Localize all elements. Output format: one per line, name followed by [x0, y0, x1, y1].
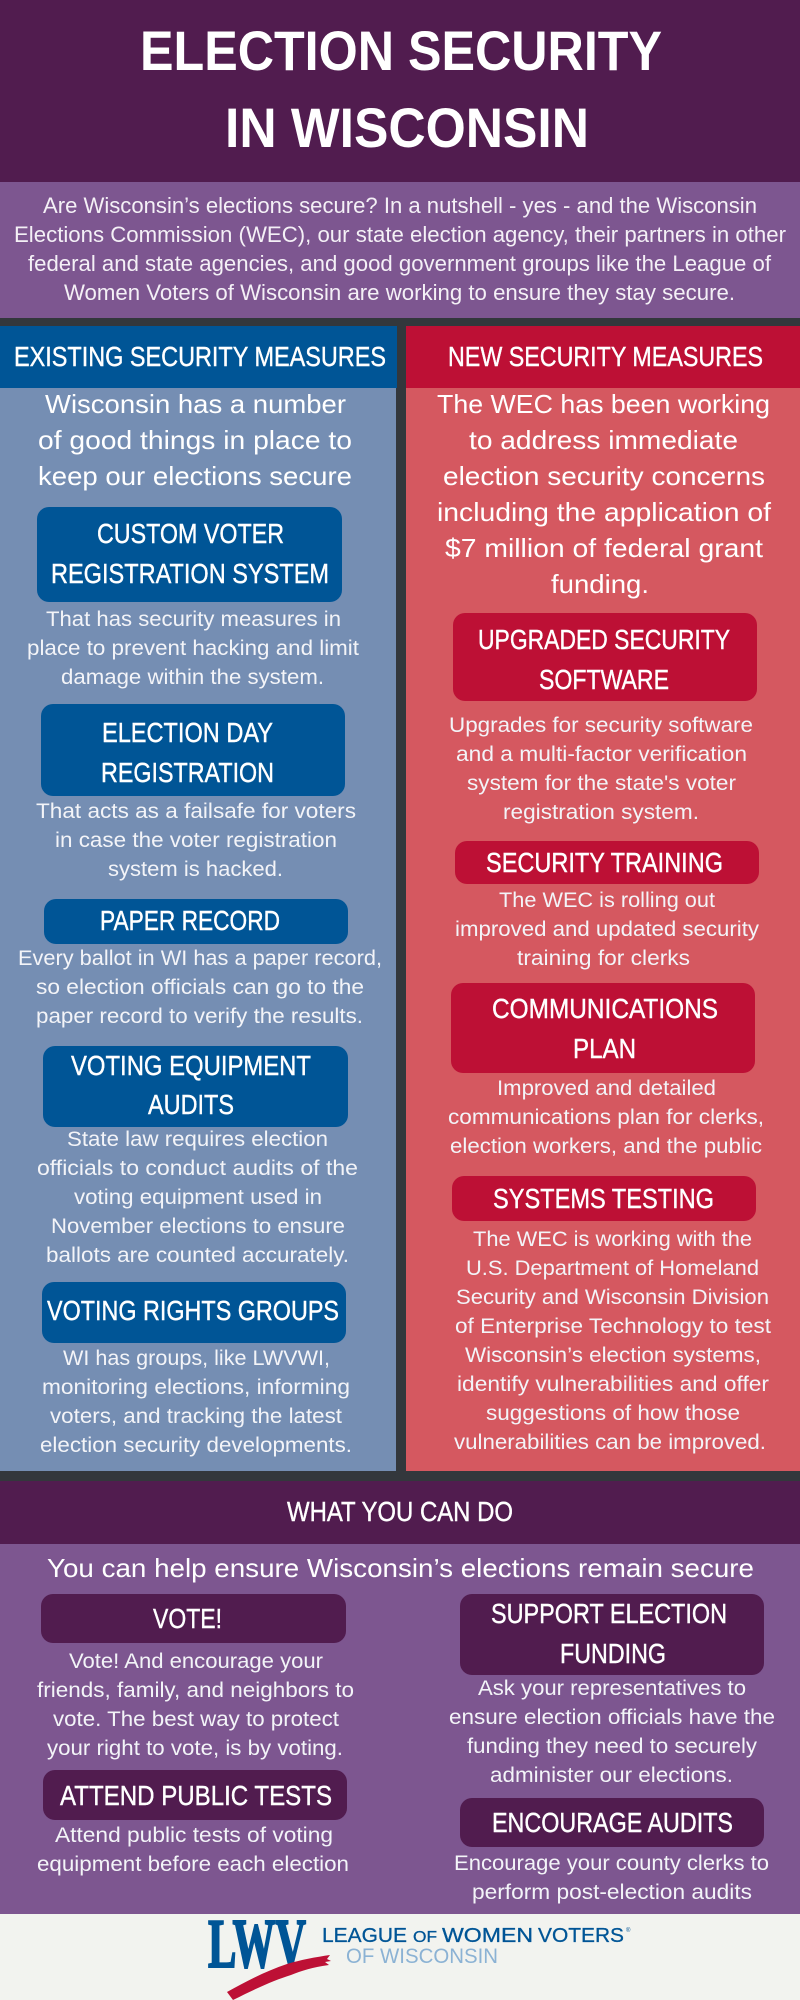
- lead text: existing: Wisconsin has a number: [45, 389, 346, 419]
- text: support election funding: funding they need to securely: [467, 1735, 758, 1758]
- text: encourage audits: [454, 1852, 769, 1904]
- text: security training: improved and updated security: [455, 918, 760, 941]
- text: systems testing: identify vulnerabilities and offer: [457, 1373, 769, 1396]
- text: paper record: so election officials can go to the: [36, 976, 364, 999]
- intro text block: Women Voters of Wisconsin are working to ensure they stay secure.: [64, 280, 735, 305]
- text: voting equipment audits: officials to conduct audits of the: [37, 1157, 358, 1180]
- text: voting rights groups: voters, and tracking the latest: [50, 1405, 342, 1428]
- text: voting rights groups: monitoring elections, informing: [42, 1376, 350, 1399]
- title: [0, 0, 800, 182]
- button: vote: [41, 1594, 346, 1643]
- button: voting rights groups: [42, 1282, 346, 1343]
- button: voting equipment audits: [43, 1046, 348, 1127]
- lead text: new: $7 million of federal grant: [445, 533, 764, 563]
- button: upgraded security software: UPGRADED SECURITY: [478, 624, 730, 655]
- text: attend public tests: Attend public tests of voting: [55, 1824, 333, 1847]
- button: election day registration: REGISTRATION: [101, 757, 274, 788]
- text: encourage audits: Encourage your county clerks to: [454, 1852, 769, 1875]
- text: custom voter registration system: place to prevent hacking and limit: [27, 637, 359, 660]
- text: election day registration: That acts as a failsafe for voters: [36, 800, 356, 823]
- text: vote: vote. The best way to protect: [53, 1708, 339, 1731]
- logo wordmark: VOTERS: [538, 1924, 624, 1947]
- intro text block: Are Wisconsin’s elections secure? In a nutshell - yes - and the Wisconsin: [43, 193, 757, 218]
- text: vote: Vote! And encourage your: [69, 1650, 323, 1673]
- heading: existing security measures: EXISTING SECURITY MEASURES: [14, 341, 386, 372]
- text: custom voter registration system: damage within the system.: [61, 666, 324, 689]
- heading: what you can do: WHAT YOU CAN DO: [287, 1496, 513, 1527]
- button: election day registration: ELECTION DAY: [102, 717, 273, 748]
- text: custom voter registration system: That has security measures in: [46, 608, 341, 631]
- button: encourage audits: ENCOURAGE AUDITS: [492, 1807, 733, 1838]
- heading: existing security measures: [0, 326, 397, 388]
- lead text: existing: of good things in place to: [38, 425, 352, 455]
- intro text block: federal and state agencies, and good government groups like the League of: [28, 251, 772, 276]
- panel: what you can do: [0, 1481, 800, 1914]
- text: attend public tests: [37, 1824, 349, 1876]
- intro text block: Elections Commission (WEC), our state election agency, their partners in other: [14, 222, 786, 247]
- lead text: existing: keep our elections secure: [38, 461, 352, 491]
- text: encourage audits: perform post-election audits: [472, 1881, 752, 1904]
- text: voting equipment audits: voting equipment used in: [74, 1186, 322, 1209]
- text: upgraded security software: and a multi-factor verification: [456, 743, 747, 766]
- lead text: existing: [38, 389, 352, 491]
- text: vote: your right to vote, is by voting.: [47, 1737, 343, 1760]
- button: support election funding: [460, 1594, 764, 1675]
- text: communications plan: communications plan for clerks,: [448, 1106, 764, 1129]
- panel: existing security measures: [0, 326, 397, 1471]
- text: upgraded security software: [449, 714, 753, 824]
- logo wordmark: ®: [626, 1927, 631, 1934]
- text: support election funding: [449, 1677, 775, 1787]
- text: support election funding: ensure election officials have the: [449, 1706, 775, 1729]
- button: paper record: [44, 899, 348, 944]
- button: attend public tests: ATTEND PUBLIC TESTS: [60, 1780, 332, 1811]
- text: paper record: [18, 947, 382, 1028]
- button: support election funding: SUPPORT ELECTION: [491, 1598, 727, 1629]
- text: voting equipment audits: State law requires election: [67, 1128, 328, 1151]
- text: vote: [37, 1650, 354, 1760]
- button: communications plan: PLAN: [573, 1033, 636, 1064]
- text: upgraded security software: registration system.: [503, 801, 699, 824]
- text: election day registration: in case the voter registration: [55, 829, 337, 852]
- lead text: new: including the application of: [437, 497, 772, 527]
- text: attend public tests: equipment before each election: [37, 1853, 349, 1876]
- button: communications plan: [451, 983, 755, 1073]
- text: systems testing: Security and Wisconsin Division: [456, 1286, 769, 1309]
- text: election day registration: [36, 800, 356, 881]
- logo wordmark: LEAGUE: [322, 1924, 407, 1947]
- text: systems testing: U.S. Department of Homeland: [466, 1257, 759, 1280]
- text: voting rights groups: WI has groups, like LWVWI,: [63, 1347, 330, 1370]
- button: security training: [455, 841, 759, 884]
- text: paper record: Every ballot in WI has a paper record,: [18, 947, 382, 970]
- text: election day registration: system is hacked.: [108, 858, 283, 881]
- button: support election funding: FUNDING: [560, 1638, 666, 1669]
- logo wordmark: OF WISCONSIN: [346, 1945, 498, 1968]
- button: systems testing: SYSTEMS TESTING: [493, 1183, 714, 1214]
- text: communications plan: election workers, and the public: [450, 1135, 762, 1158]
- text: custom voter registration system: [27, 608, 359, 689]
- text: systems testing: Wisconsin’s election systems,: [465, 1344, 761, 1367]
- text: communications plan: [448, 1077, 764, 1158]
- text: systems testing: of Enterprise Technology to test: [455, 1315, 771, 1338]
- button: custom voter registration system: REGISTRATION SYSTEM: [51, 558, 329, 589]
- text: voting equipment audits: [37, 1128, 358, 1267]
- text: support election funding: Ask your representatives to: [478, 1677, 746, 1700]
- heading: what you can do: [0, 1481, 800, 1544]
- logo wordmark: [322, 1924, 631, 1968]
- text: upgraded security software: system for the state's voter: [467, 772, 736, 795]
- button: communications plan: COMMUNICATIONS: [492, 993, 718, 1024]
- button: custom voter registration system: CUSTOM VOTER: [97, 518, 284, 549]
- logo wordmark: OF: [413, 1929, 437, 1946]
- heading: new security measures: [406, 326, 800, 388]
- lead text: new: election security concerns: [443, 461, 765, 491]
- intro text block: [0, 182, 800, 318]
- button: paper record: PAPER RECORD: [100, 905, 280, 936]
- panel: new security measures: [406, 326, 800, 1471]
- footer: league of women voters logo: [0, 1906, 800, 2000]
- lead text: new: [437, 389, 772, 599]
- button: voting rights groups: VOTING RIGHTS GROUPS: [47, 1295, 339, 1326]
- title: IN WISCONSIN: [225, 97, 589, 159]
- text: systems testing: vulnerabilities can be improved.: [454, 1431, 766, 1454]
- text: vote: friends, family, and neighbors to: [37, 1679, 354, 1702]
- button: vote: VOTE!: [153, 1603, 222, 1634]
- lead text: new: The WEC has been working: [437, 389, 770, 419]
- text: systems testing: [454, 1228, 771, 1454]
- text: systems testing: suggestions of how those: [486, 1402, 740, 1425]
- lead text: new: funding.: [551, 569, 649, 599]
- button: security training: SECURITY TRAINING: [486, 847, 723, 878]
- button: upgraded security software: [453, 613, 757, 701]
- text: systems testing: The WEC is working with the: [473, 1228, 752, 1251]
- logo mark: LWV: LWV: [208, 1906, 306, 1983]
- button: upgraded security software: SOFTWARE: [539, 664, 669, 695]
- logo wordmark: WOMEN: [442, 1924, 533, 1947]
- lead text: what you can do: You can help ensure Wisconsin’s elections remain secure: [47, 1553, 754, 1583]
- logo swoosh: [227, 1955, 331, 2000]
- text: voting equipment audits: ballots are counted accurately.: [46, 1244, 349, 1267]
- text: security training: training for clerks: [517, 947, 690, 970]
- button: encourage audits: [460, 1798, 764, 1847]
- button: voting equipment audits: AUDITS: [148, 1089, 234, 1120]
- button: custom voter registration system: [37, 507, 342, 602]
- text: security training: The WEC is rolling out: [499, 889, 715, 912]
- text: voting rights groups: [40, 1347, 352, 1457]
- button: attend public tests: [43, 1770, 347, 1820]
- button: systems testing: [452, 1176, 756, 1221]
- button: voting equipment audits: VOTING EQUIPMENT: [71, 1050, 311, 1081]
- button: election day registration: [41, 704, 345, 796]
- text: paper record: paper record to verify the results.: [36, 1005, 363, 1028]
- text: communications plan: Improved and detailed: [497, 1077, 716, 1100]
- title: ELECTION SECURITY: [140, 20, 662, 82]
- lead text: new: to address immediate: [469, 425, 738, 455]
- text: security training: [455, 889, 760, 970]
- text: support election funding: administer our elections.: [490, 1764, 733, 1787]
- text: upgraded security software: Upgrades for security software: [449, 714, 753, 737]
- text: voting rights groups: election security developments.: [40, 1434, 352, 1457]
- text: voting equipment audits: November elections to ensure: [51, 1215, 345, 1238]
